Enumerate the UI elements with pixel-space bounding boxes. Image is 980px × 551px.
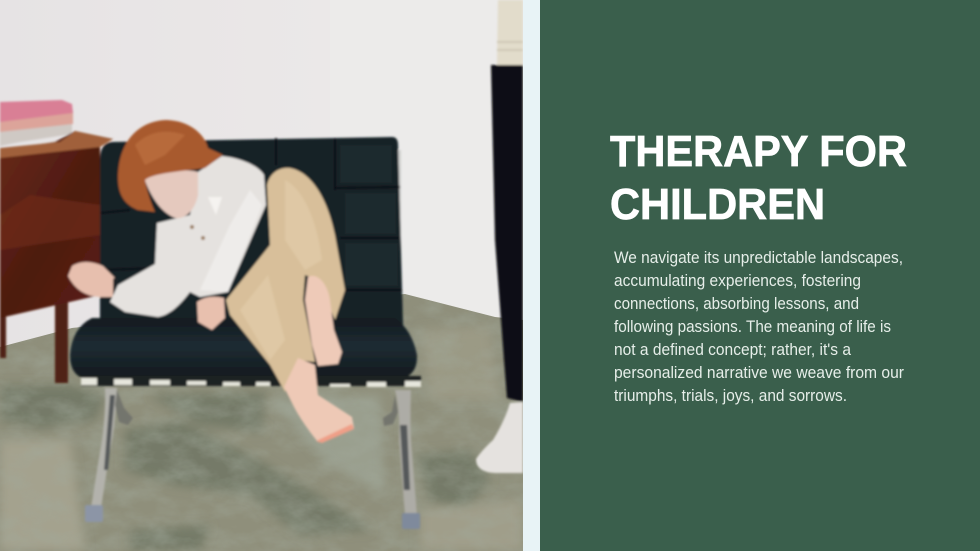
body text: triumphs, trials, joys, and sorrows. — [614, 387, 847, 405]
head and face — [144, 170, 198, 218]
hand on seat — [197, 297, 225, 330]
body text: accumulating experiences, fostering — [614, 272, 861, 290]
chair straps — [81, 376, 421, 387]
knit top — [497, 0, 523, 65]
title — [610, 127, 907, 229]
panel: green text panel — [540, 0, 980, 551]
bent leg foot — [305, 276, 342, 366]
concrete floor — [0, 290, 523, 551]
body text: following passions. The meaning of life is — [614, 318, 891, 336]
shirt — [110, 156, 266, 317]
wooden side table — [0, 131, 113, 383]
body text: not a defined concept; rather, it's a — [614, 341, 852, 359]
body text: connections, absorbing lessons, and — [614, 295, 859, 313]
photo: child curled up on a black leather chair — [0, 0, 523, 551]
body text: personalized narrative we weave from our — [614, 364, 904, 382]
pants — [226, 168, 345, 392]
body text — [614, 249, 904, 405]
hair — [118, 120, 223, 212]
black trousers — [491, 65, 523, 402]
pale divider strip — [523, 0, 540, 551]
title: THERAPY FOR — [610, 127, 907, 176]
dangling foot — [284, 358, 354, 442]
standing adult — [476, 0, 523, 473]
chair chrome back frame — [397, 150, 401, 325]
child — [68, 120, 354, 443]
title: CHILDREN — [610, 180, 825, 229]
wall — [0, 0, 523, 360]
white sneaker — [476, 402, 523, 473]
body text: We navigate its unpredictable landscapes, — [614, 249, 903, 267]
chair back — [100, 137, 403, 325]
chair left chrome leg — [85, 388, 133, 522]
chair right chrome leg — [383, 390, 420, 529]
chair seat cushion — [70, 318, 417, 380]
arm and hand — [68, 262, 117, 297]
books on table — [0, 100, 73, 146]
